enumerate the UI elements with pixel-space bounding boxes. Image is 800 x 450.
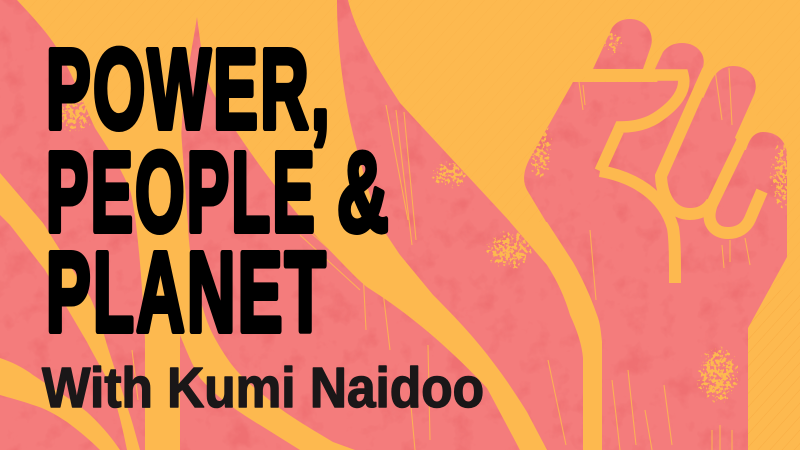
fist fingers xyxy=(593,19,652,69)
stripe: right vertical xyxy=(510,222,602,450)
title line 2: PEOPLE xyxy=(46,129,317,255)
leaf: right and arm xyxy=(337,0,787,450)
stripe: bottom-left curve xyxy=(0,358,120,450)
subtitle: With Kumi Naidoo xyxy=(42,356,484,420)
title line 3: PLANET xyxy=(46,229,328,355)
stripe: left curve xyxy=(0,173,140,450)
stripe: centre vertical and sweep xyxy=(95,128,355,450)
stripe: diagonal to bottom xyxy=(300,180,547,450)
denser hatching at right edge xyxy=(748,290,800,450)
title line 1: POWER, xyxy=(46,26,332,152)
yellow leaf stripes xyxy=(0,128,602,450)
title ampersand: & xyxy=(337,129,391,255)
title xyxy=(46,26,391,355)
leaf: left and centre xyxy=(0,0,520,450)
yellow brush streaks xyxy=(132,68,750,450)
icon: raised fist outlines xyxy=(585,70,762,283)
